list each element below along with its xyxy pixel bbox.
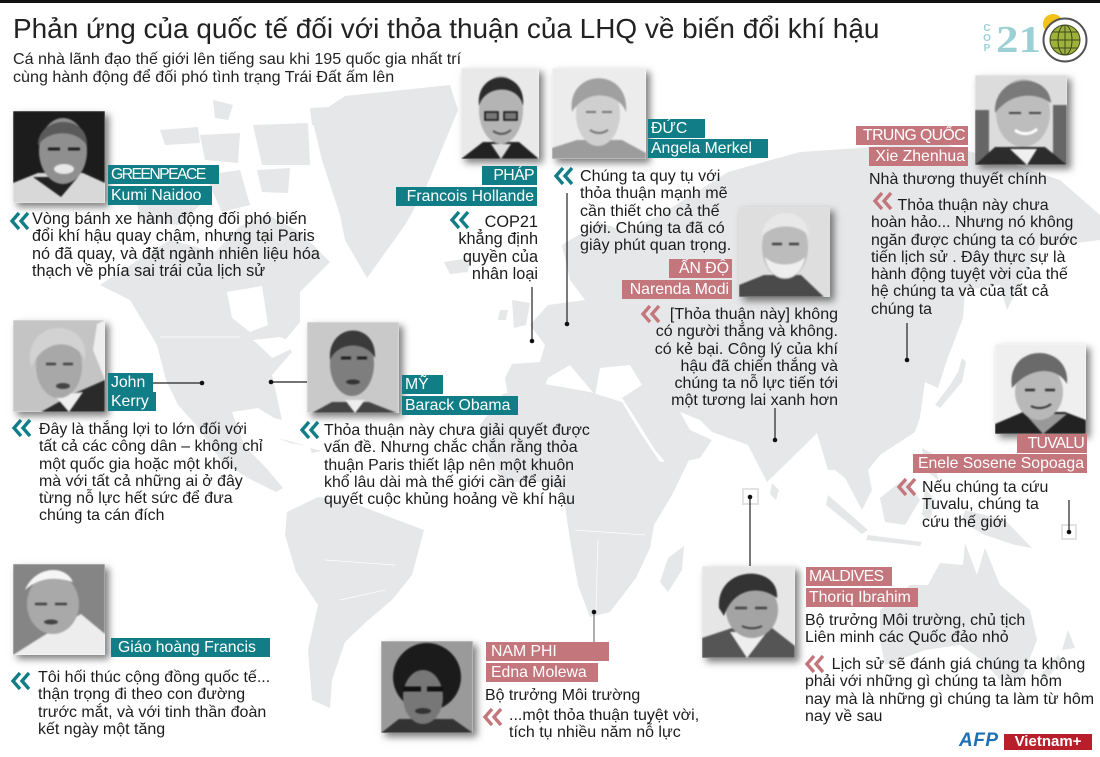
quote: nay về sau [805,708,882,725]
icon: quote mark [450,210,470,230]
icon: COP21 logo: C [983,23,991,34]
quote: chúng ta [871,301,932,318]
label: country: ẤN ĐỘ [679,260,729,277]
quote: Vòng bánh xe hành động đối phó biến [32,210,307,228]
quote: thạch về phía sai trái của lịch sử [32,262,265,280]
quote: Đây là thắng lợi to lớn đối với [39,421,247,438]
quote: Chúng ta quy tụ với [580,167,720,185]
title: Phản ứng của quốc tế đối với thỏa thuận của LHQ về biến đổi khí hậu [13,13,879,44]
photo: Barack Obama [307,322,399,413]
label: name: Edna Molewa [491,664,587,681]
icon: COP21 logo: P [984,43,991,54]
quote: đổi khí hậu quay chậm, nhưng tại Paris [32,227,315,245]
label: country: MỸ [405,376,429,393]
icon: quote mark [640,305,660,323]
quote [458,213,538,283]
role: Bộ trưởng Môi trường [485,687,640,704]
label: country [402,375,443,394]
quote: vấn đề. Nhưng chắc chắn rằng thỏa [324,439,578,456]
subtitle: Cá nhà lãnh đạo thế giới lên tiếng sau khi 195 quốc gia nhất trí [13,50,461,68]
icon: COP21 logo: O [983,33,991,44]
quote: thận trọng đi theo con đường [38,686,245,703]
panel: Francois Hollande [396,66,548,283]
subtitle [13,50,461,86]
label: name: Xie Zhenhua [875,148,965,165]
label: country [486,642,609,661]
quote: khổ lâu dài mà thế giới cần để giải [324,474,566,491]
label: country: PHÁP [493,167,534,184]
quote: kết ngày một tăng [38,721,165,738]
icon: quote mark [804,654,824,674]
panel: Enele Sosene Sopoaga [896,342,1096,531]
quote: trước mắt, và với tinh thần đoàn [38,704,266,721]
icon: quote mark [872,192,892,210]
quote: thuận Paris thiết lập nên một khuôn [324,457,574,474]
label: first name [108,373,153,392]
quote: có người thắng và không. [656,323,838,340]
role: Nhà thương thuyết chính [869,171,1047,188]
label: name: Enele Sosene Sopoaga [918,455,1084,472]
quote: quyết cuộc khủng hoảng về khí hậu [324,491,575,508]
photo: Enele Sosene Sopoaga [995,344,1086,434]
label: organisation: GREENPEACE [111,166,205,183]
panel: Narenda Modi [622,206,840,409]
subtitle: cùng hành động để đối phó tình trạng Trái Đất ấm lên [13,68,394,86]
quote [509,707,699,741]
icon: quote mark [10,212,30,230]
label: name: Francois Hollande [407,188,534,205]
label: name: Giáo hoàng Francis [118,639,256,656]
quote: quyền của [463,248,538,266]
quote: phải với những gì chúng ta làm hôm [805,673,1062,690]
quote: Lịch sử sẽ đánh giá chúng ta không [832,656,1085,673]
quote: hậu đã chiến thắng và [681,358,838,375]
icon: quote mark [12,418,32,438]
logo: Vietnam+: Vietnam+ [1015,733,1081,750]
role [805,612,1025,646]
quote: tích tụ nhiều năm nỗ lực [509,724,681,741]
quote [655,306,838,409]
quote: Tuvalu, chúng ta [922,496,1039,513]
quote [805,656,1094,725]
quote: COP21 [485,213,538,231]
photo: Kumi Naidoo [13,111,105,203]
logo: AFP: AFP [959,730,998,751]
quote [871,197,1077,318]
panel: Barack Obama [300,320,590,508]
role: Liên minh các Quốc đảo nhỏ [805,629,1009,646]
icon: quote mark [482,708,502,726]
label: country: NAM PHI [491,643,557,660]
quote: chúng ta nỗ lực tiến tới [674,375,838,392]
quote [580,167,731,254]
quote: hành động tuyệt vời của thế [871,266,1068,283]
quote: từng nỗ lực hết sức để đưa [39,490,233,507]
label: country: MALDIVES [809,568,883,585]
label: first name: John [111,374,145,391]
quote: một tương lai xanh hơn [671,392,838,409]
label: country: TUVALU [1028,435,1084,452]
panel: Edna Molewa [380,640,699,742]
quote: mà với tất cả những ai ở đây [39,473,243,490]
quote: tiến lịch sử . Đây thực sự là [871,249,1065,266]
quote [324,422,590,508]
icon: quote mark [10,672,30,690]
photo: Francois Hollande [461,68,539,159]
quote: có kẻ bại. Công lý của khí [655,341,838,358]
icon: quote mark [300,420,320,440]
quote: Thỏa thuận này chưa giải quyết được [324,422,590,439]
label: name: Narenda Modi [630,281,729,298]
label: name: Barack Obama [405,397,510,414]
quote: Thỏa thuận này chưa [897,197,1049,214]
quote: [Thỏa thuận này] không [670,306,838,323]
label: last name: Kerry [111,393,149,410]
photo: Thoriq Ibrahim [702,566,795,658]
quote: giây phút quan trọng. [580,236,731,254]
icon: COP21 logo: 21 [996,19,1041,61]
quote [38,669,270,738]
quote: nhân loại [472,265,538,283]
photo: Narenda Modi [739,207,830,297]
quote [39,420,263,524]
label: country: TRUNG QUỐC [863,127,965,144]
panel: Pope Francis [10,562,270,738]
label: country: ĐỨC [651,120,687,137]
quote: nó đã quay, và đặt ngành nhiên liệu hóa [32,245,320,263]
quote: khẳng định [458,230,538,248]
photo: Pope Francis [13,564,105,655]
quote: nay mà là những gì chúng ta làm từ hôm [805,691,1094,708]
panel: John Kerry [12,318,263,524]
panel: Xie Zhenhua [856,74,1077,318]
photo: Angela Merkel [552,68,646,159]
label: name: Thoriq Ibrahim [809,589,911,606]
quote: cứu thế giới [922,514,1007,531]
quote: Tôi hối thúc cộng đồng quốc tế... [38,669,270,686]
quote: hệ chúng ta và của tất cả [871,283,1049,300]
role: Bộ trưởng Môi trường, chủ tịch [805,612,1025,629]
label: country [482,166,537,185]
icon: quote mark [554,166,574,186]
panel: Kumi Naidoo [10,110,320,280]
quote: hoàn hảo... Nhưng nó không [871,214,1073,231]
quote: giới. Chúng ta đã có [580,219,725,237]
icon: quote mark [896,478,916,496]
quote: ...một thỏa thuận tuyệt vời, [509,707,699,724]
label: country [648,119,705,138]
photo: Edna Molewa [381,641,473,733]
quote: cần thiết cho cả thế [580,202,720,220]
panel: Angela Merkel [550,66,768,254]
quote: thỏa thuận mạnh mẽ [580,184,728,202]
quote: tất cả các công dân – không chỉ [39,438,263,455]
photo: Xie Zhenhua [975,75,1067,165]
quote: Nếu chúng ta cứu [922,479,1048,496]
quote: một quốc gia hoặc một khối, [39,456,238,473]
photo: John Kerry [13,320,105,412]
top black bar [0,0,1100,3]
quote: ngăn được chúng ta có bước [871,232,1077,249]
label: name: Angela Merkel [651,140,752,157]
panel: Thoriq Ibrahim [700,564,1094,725]
quote [32,210,320,280]
icon: COP21 logo [983,14,1088,62]
label: name: Kumi Naidoo [111,187,201,204]
quote [922,479,1048,531]
quote: chúng ta cán đích [39,507,164,524]
